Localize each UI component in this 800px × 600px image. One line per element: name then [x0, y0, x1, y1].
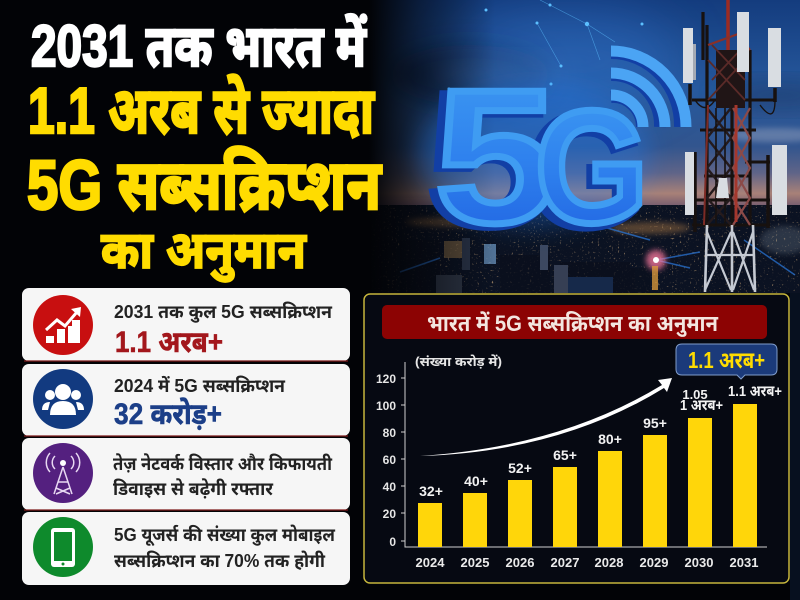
5G extrusion [427, 54, 645, 266]
title line 4: का अनुमान [101, 222, 307, 283]
bar value labels: 40+ [464, 473, 488, 489]
card: 2024 subscriptions: 2024 में 5G सब्सक्रिप्शन [114, 375, 286, 396]
panel: bar chart [364, 293, 800, 600]
arrow: growth trend [420, 378, 672, 456]
bar value labels: 95+ [643, 415, 667, 431]
callout: 1.1 billion [676, 344, 777, 379]
year labels: 2025 [461, 555, 489, 570]
icon: smartphone [33, 517, 93, 577]
card: share of mobile subscriptions [22, 512, 350, 585]
year labels: 2029 [640, 555, 668, 570]
icon: people [33, 369, 93, 429]
y axis [376, 362, 767, 549]
bar value labels: 1 अरब+ [680, 397, 723, 414]
card: 2024 subscriptions [22, 364, 350, 436]
year labels [416, 555, 758, 570]
5G face: G [535, 77, 648, 256]
bar value labels: 52+ [508, 460, 532, 476]
city lights [330, 205, 800, 293]
callout: 1.1 billion: 1.1 अरब+ [688, 347, 765, 373]
title [27, 14, 383, 283]
5G face: 5 [435, 51, 557, 263]
card: share of mobile subscriptions: सब्सक्रिप्शन का 70% तक होगी [114, 551, 326, 571]
bar value labels: 65+ [553, 447, 577, 463]
title line 2: 1.1 अरब से ज्यादा [28, 73, 375, 147]
y axis: 0 [389, 535, 396, 549]
card: network expansion: डिवाइस से बढ़ेगी रफ्तार [113, 479, 274, 499]
tower base lattice [705, 225, 755, 292]
card: share of mobile subscriptions: 5G यूजर्स की संख्या कुल मोबाइल [114, 524, 336, 547]
card: network expansion [22, 438, 350, 510]
icon: telecom tower [683, 0, 787, 292]
bar value labels: 80+ [598, 431, 622, 447]
year labels: 2031 [730, 555, 758, 570]
title line 3: 5G सब्सक्रिप्शन [27, 146, 383, 224]
network dots [448, 0, 644, 90]
bars [418, 404, 757, 547]
5G face [435, 51, 648, 263]
hero photo: night sky and city [330, 0, 800, 293]
antennas [683, 12, 787, 215]
panel: stat cards [22, 288, 350, 585]
year labels: 2026 [506, 555, 534, 570]
5G extrusion: G [527, 81, 645, 260]
bar value labels: 1.1 अरब+ [728, 383, 782, 400]
icon: rising chart [33, 295, 93, 355]
card: total subscriptions 2031: 1.1 अरब+ [115, 326, 223, 359]
5G extrusion: 5 [427, 54, 554, 266]
y axis: 60 [383, 453, 396, 467]
y axis: 40 [383, 480, 396, 494]
bar value labels [419, 383, 782, 499]
title line 1: 2031 तक भारत में [31, 14, 367, 79]
year labels: 2030 [685, 555, 713, 570]
bar value labels: 1.05 [682, 387, 708, 402]
card: total subscriptions 2031: 2031 तक कुल 5G सब्सक्रिप्शन [114, 302, 333, 323]
bar value labels: 32+ [419, 483, 443, 499]
card: 2024 subscriptions: 32 करोड़+ [114, 397, 222, 431]
year labels: 2024 [416, 555, 445, 570]
y axis: 100 [376, 399, 396, 413]
chart heading [382, 305, 767, 339]
chart heading: भारत में 5G सब्सक्रिप्शन का अनुमान [427, 311, 718, 337]
icon: signal tower [33, 443, 93, 503]
icon: 3D 5G logo [420, 51, 686, 266]
y axis: 80 [383, 426, 396, 440]
card: network expansion: तेज़ नेटवर्क विस्तार और किफायती [113, 453, 333, 474]
year labels: 2027 [551, 555, 579, 570]
unit note: (संख्या करोड़ में) [415, 354, 502, 369]
wifi arcs [611, 51, 686, 127]
year labels: 2028 [595, 555, 623, 570]
card: total subscriptions 2031 [22, 288, 350, 361]
y axis: 120 [376, 372, 396, 386]
y axis: 20 [383, 507, 396, 521]
